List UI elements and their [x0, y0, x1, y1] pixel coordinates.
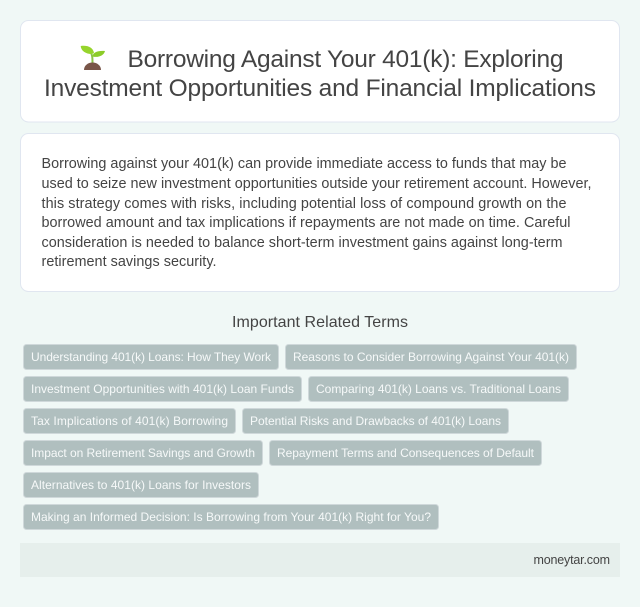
tag: [242, 408, 508, 434]
title text: Borrowing Against Your 401(k): Exploring: [128, 46, 564, 73]
tag: Tax Implications of 401(k) Borrowing: [31, 414, 228, 428]
title text: Investment Opportunities and Financial Implications: [44, 75, 596, 102]
summary text: this strategy comes with risks, including potential loss of compound growth on the: [42, 196, 566, 212]
summary text: [42, 156, 592, 270]
tag: Potential Risks and Drawbacks of 401(k) Loans: [250, 414, 501, 428]
footer: [20, 543, 620, 577]
tag: Repayment Terms and Consequences of Default: [277, 446, 535, 460]
summary text: Borrowing against your 401(k) can provide immediate access to funds that may be: [42, 156, 566, 172]
tag: [286, 344, 576, 370]
panel: summary: [20, 134, 620, 292]
tag: Understanding 401(k) Loans: How They Work: [31, 350, 272, 364]
tag: [24, 344, 278, 370]
tag: [270, 440, 542, 466]
summary text: used to seize new investment opportunities outside your retirement account. However,: [42, 176, 592, 192]
tag: [24, 376, 302, 402]
summary text: consideration is needed to balance short-term investment gains against long-term: [42, 235, 562, 251]
tag: Comparing 401(k) Loans vs. Traditional Loans: [316, 382, 561, 396]
tag: Investment Opportunities with 401(k) Loan Funds: [31, 382, 294, 396]
heading: important related terms: Important Related Terms: [232, 314, 408, 331]
footer: moneytar.com: [534, 553, 610, 567]
tag: [24, 504, 438, 530]
tag: [24, 472, 258, 498]
tag: [24, 440, 262, 466]
tag: Reasons to Consider Borrowing Against Your 401(k): [293, 350, 569, 364]
panel: title: [20, 20, 620, 122]
title text: [44, 46, 596, 102]
tag: Impact on Retirement Savings and Growth: [31, 446, 255, 460]
summary text: retirement savings security.: [42, 254, 216, 270]
summary text: borrowed amount and tax implications if repayments are not made on time. Careful: [42, 215, 570, 231]
related term tags: [24, 344, 576, 530]
tag: Alternatives to 401(k) Loans for Investors: [31, 478, 251, 492]
tag: [24, 408, 236, 434]
tag: [308, 376, 568, 402]
icon: seedling: [81, 46, 105, 70]
tag: Making an Informed Decision: Is Borrowing from Your 401(k) Right for You?: [31, 510, 431, 524]
